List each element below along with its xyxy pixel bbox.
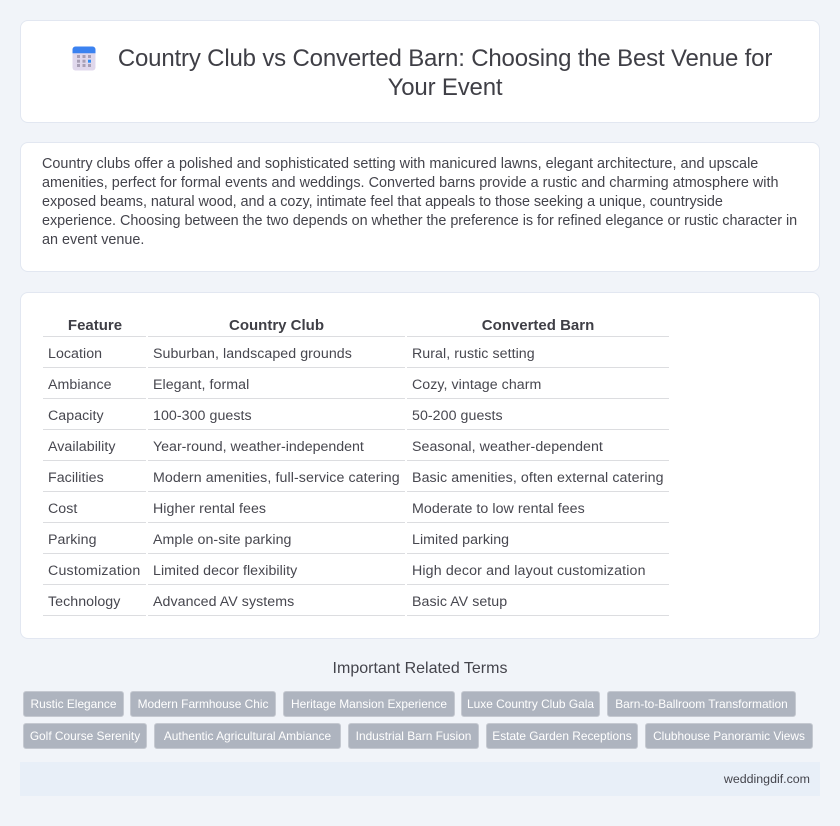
text block: summary paragraph: [42, 156, 797, 248]
comparison table: Ambiance: [48, 377, 112, 393]
related terms tags: Industrial Barn Fusion: [356, 729, 471, 743]
comparison table: Year-round, weather-independent: [153, 439, 364, 455]
related terms tags: Estate Garden Receptions: [492, 729, 632, 743]
related terms tags: Heritage Mansion Experience: [291, 697, 447, 711]
related terms tags: Modern Farmhouse Chic: [138, 697, 268, 711]
comparison table: 100-300 guests: [153, 408, 252, 424]
related terms tags: Golf Course Serenity: [30, 729, 140, 743]
comparison table: Higher rental fees: [153, 501, 266, 517]
text block: summary paragraph: amenities, perfect for formal events and weddings. Converted barns provide a rustic and charming atmosphere with: [42, 175, 779, 191]
comparison table: Location: [48, 346, 102, 362]
panel: summary: [20, 142, 820, 272]
comparison table: [43, 317, 669, 616]
table header: Converted Barn: [482, 317, 594, 334]
comparison table: Parking: [48, 532, 97, 548]
comparison table: Seasonal, weather-dependent: [412, 439, 603, 455]
icon: calendar: [72, 46, 96, 70]
comparison table: Suburban, landscaped grounds: [153, 346, 352, 362]
comparison table: Capacity: [48, 408, 104, 424]
comparison table: Limited decor flexibility: [153, 563, 297, 579]
comparison table: Basic amenities, often external catering: [412, 470, 664, 486]
comparison table: 50-200 guests: [412, 408, 503, 424]
comparison table: Moderate to low rental fees: [412, 501, 585, 517]
table header: Country Club: [229, 317, 324, 334]
related terms tags: Rustic Elegance: [31, 697, 116, 711]
comparison table: Ample on-site parking: [153, 532, 291, 548]
footer source: weddingdif.com: [724, 772, 810, 786]
comparison table: Rural, rustic setting: [412, 346, 535, 362]
text block: summary paragraph: an event venue.: [42, 232, 144, 248]
related terms tags: Clubhouse Panoramic Views: [653, 729, 805, 743]
comparison table: Elegant, formal: [153, 377, 249, 393]
title: [118, 45, 772, 101]
table header: [68, 317, 594, 334]
comparison table: Technology: [48, 594, 120, 610]
comparison table: Cost: [48, 501, 77, 517]
panel: header: [20, 20, 820, 123]
comparison table: Availability: [48, 439, 116, 455]
comparison table: Basic AV setup: [412, 594, 507, 610]
comparison table: Customization: [48, 563, 140, 579]
comparison table: Advanced AV systems: [153, 594, 294, 610]
comparison table: Cozy, vintage charm: [412, 377, 541, 393]
table header: Feature: [68, 317, 122, 334]
comparison table: High decor and layout customization: [412, 563, 646, 579]
related terms tags: Barn-to-Ballroom Transformation: [615, 697, 788, 711]
text block: summary paragraph: Country clubs offer a polished and sophisticated setting with manicured lawns, elegant architecture, and upscale: [42, 156, 758, 172]
panel: comparison table: [20, 292, 820, 639]
comparison table: Modern amenities, full-service catering: [153, 470, 400, 486]
text block: summary paragraph: experience. Choosing between the two depends on whether the preference is for refined elegance or rustic character in: [42, 213, 797, 229]
related terms tags: [23, 691, 813, 749]
title: Your Event: [388, 74, 502, 101]
comparison table: Facilities: [48, 470, 104, 486]
footer bar: [20, 762, 820, 796]
title: Country Club vs Converted Barn: Choosing the Best Venue for: [118, 45, 772, 72]
related terms tags: Authentic Agricultural Ambiance: [164, 729, 331, 743]
text block: summary paragraph: exposed beams, natural wood, and a cozy, intimate feel that appeals to those seeking a unique, countryside: [42, 194, 723, 210]
heading: important related terms: Important Related Terms: [333, 660, 507, 677]
related terms tags: Luxe Country Club Gala: [467, 697, 594, 711]
comparison table: Limited parking: [412, 532, 509, 548]
